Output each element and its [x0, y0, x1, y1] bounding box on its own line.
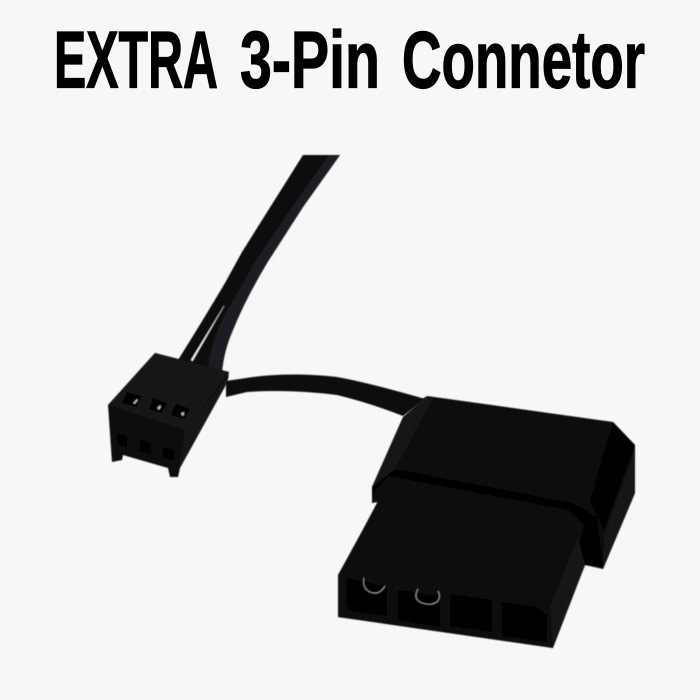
title: 3-Pin [240, 16, 380, 106]
plug front face [338, 567, 553, 648]
metal pins [133, 399, 184, 416]
rear shell right side [603, 450, 635, 569]
rear shell right chamfer [590, 422, 635, 530]
3-pin fan connector [108, 353, 229, 477]
connector top windows [122, 392, 190, 419]
Molex connector [338, 396, 635, 648]
connector front sockets [117, 433, 174, 461]
connector body [108, 353, 229, 477]
plug socket 4 [502, 602, 547, 642]
connector silhouette [338, 396, 635, 648]
plug right side face [550, 537, 585, 647]
title: EXTRA [54, 16, 218, 106]
cable bundle to fan connector [178, 155, 340, 372]
title [54, 16, 645, 106]
plug top plate [340, 482, 568, 597]
plug raised tab right [475, 556, 542, 597]
metal contacts [364, 578, 440, 604]
plug socket 1 [346, 578, 387, 616]
connector top face [108, 353, 229, 430]
connector side face [179, 375, 229, 468]
rear shell left chamfer [372, 397, 433, 487]
plug socket 2 [398, 590, 440, 627]
rear shell lip [372, 469, 603, 567]
plug socket 3 [450, 594, 492, 632]
cable to Molex connector [226, 374, 425, 416]
